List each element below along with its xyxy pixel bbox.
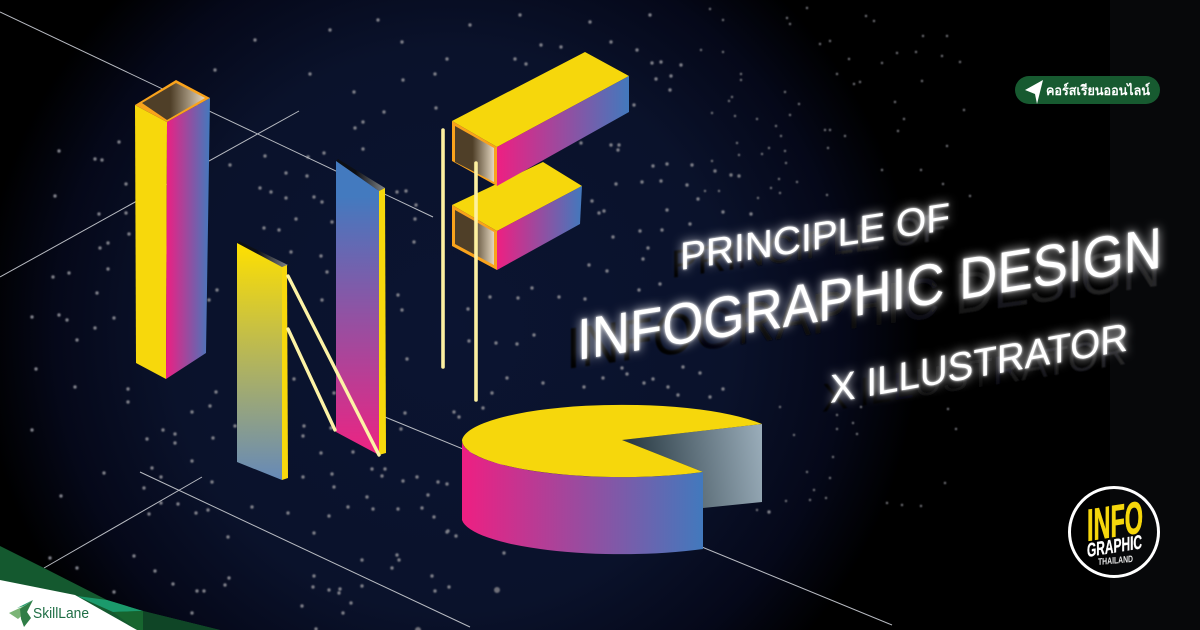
letter N: right panel: [336, 159, 386, 455]
badge: online course: [1015, 76, 1160, 104]
corner banner: SkillLane: [0, 546, 220, 630]
title: Principle of Infographic Design x Illustrator: X ILLUSTRATOR: [830, 315, 1128, 412]
letter F: glowing vertical strokes: [443, 130, 476, 400]
title shadows: [566, 206, 1161, 421]
title shadows: INFOGRAPHIC DESIGN: [566, 234, 1161, 382]
logo: Infographic Thailand: GRAPHIC: [1087, 531, 1142, 562]
badge: online course: คอร์สเรียนออนไลน์: [1046, 82, 1151, 98]
title: Principle of Infographic Design x Illustrator: INFOGRAPHIC DESIGN: [577, 216, 1162, 373]
icon: SkillLane mark: [9, 600, 33, 627]
title shadows: X ILLUSTRATOR: [822, 328, 1127, 421]
letter F: upper arm: [452, 52, 629, 186]
title shadows: PRINCIPLE OF: [671, 206, 946, 287]
letter F: lower arm: [452, 162, 582, 270]
logo: Infographic Thailand: INFO: [1087, 491, 1143, 551]
logo: Infographic Thailand: THAILAND: [1098, 554, 1133, 568]
logo: Infographic Thailand: [1070, 488, 1158, 576]
thin construction lines: [0, 12, 892, 627]
star field: [32, 8, 970, 630]
wordmark: SkillLane: [33, 606, 89, 622]
letter N: glowing diagonals: [288, 276, 379, 455]
letter N: left panel: [237, 241, 288, 480]
letter G: 3D pie chart: [462, 405, 762, 554]
title: Principle of Infographic Design x Illustrator: PRINCIPLE OF: [680, 196, 950, 279]
letter I: hollow 3D column: [135, 80, 210, 379]
